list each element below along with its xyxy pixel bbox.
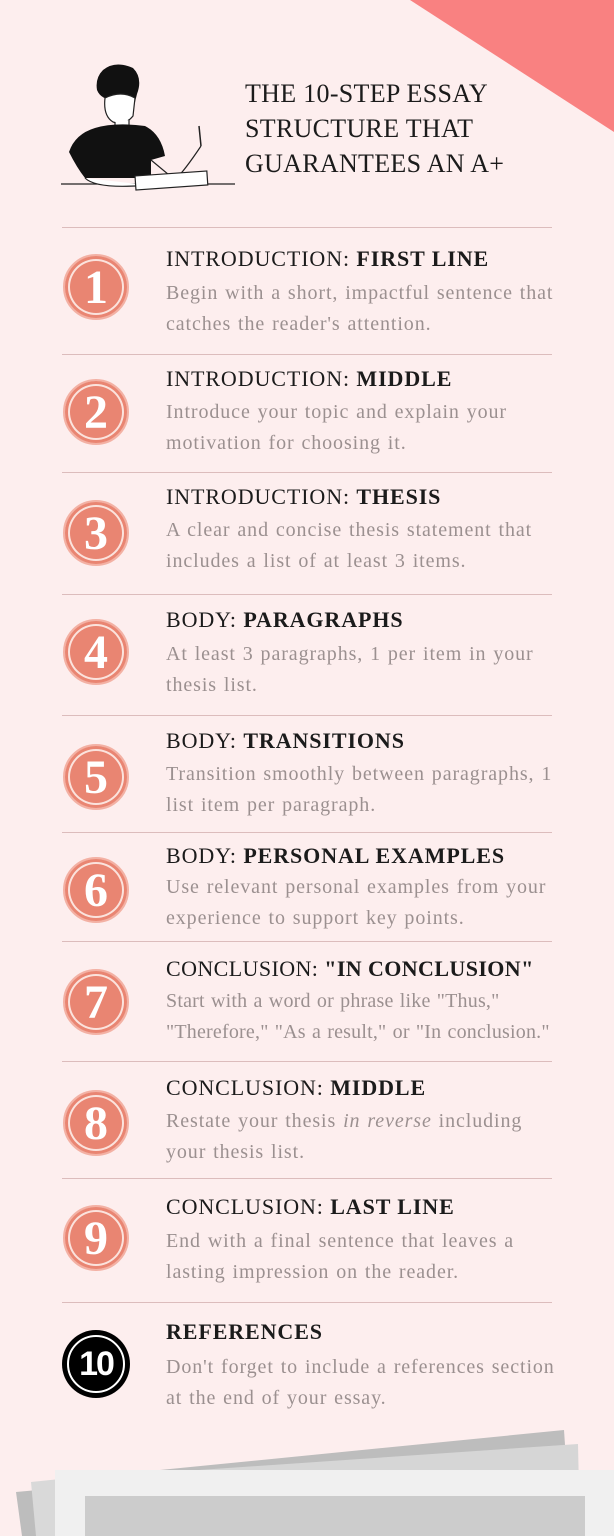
- text: [166, 643, 534, 696]
- text: lasting impression on the reader.: [166, 1261, 459, 1283]
- text: [166, 763, 552, 816]
- icon: number 5: 5: [84, 751, 108, 804]
- text: motivation for choosing it.: [166, 432, 407, 454]
- heading: INTRODUCTION: FIRST LINE: [166, 246, 489, 271]
- step 5: [63, 728, 552, 816]
- step 8: [63, 1075, 522, 1163]
- title: STRUCTURE THAT: [245, 114, 473, 143]
- heading: REFERENCES: [166, 1319, 323, 1344]
- icon: number 10: [62, 1330, 130, 1398]
- text: "Therefore," "As a result," or "In conclusion.": [166, 1021, 550, 1043]
- text: includes a list of at least 3 items.: [166, 550, 466, 572]
- icon: number 3: [63, 500, 129, 566]
- text: [166, 990, 550, 1043]
- icon: number 9: 9: [84, 1212, 108, 1265]
- heading: BODY: PARAGRAPHS: [166, 607, 404, 632]
- icon: number 6: 6: [84, 864, 108, 917]
- icon: number 7: 7: [84, 976, 108, 1029]
- text: Don't forget to include a references section: [166, 1356, 555, 1378]
- icon: number 6: [63, 857, 129, 923]
- text: catches the reader's attention.: [166, 313, 432, 335]
- text: thesis list.: [166, 674, 258, 696]
- text: Start with a word or phrase like "Thus,": [166, 990, 500, 1012]
- step 4: [63, 607, 534, 696]
- icon: number 2: [63, 379, 129, 445]
- step 6: [63, 843, 546, 929]
- text: [166, 1230, 514, 1283]
- text: [166, 1356, 555, 1409]
- heading: BODY: TRANSITIONS: [166, 728, 405, 753]
- text: A clear and concise thesis statement that: [166, 519, 532, 541]
- text: Use relevant personal examples from your: [166, 876, 546, 898]
- icon: number 5: [63, 744, 129, 810]
- heading: CONCLUSION: MIDDLE: [166, 1075, 426, 1100]
- title: [245, 79, 504, 178]
- icon: number 10: 10: [79, 1345, 113, 1383]
- step 9: [63, 1194, 514, 1283]
- text: At least 3 paragraphs, 1 per item in your: [166, 643, 534, 665]
- heading: CONCLUSION: "IN CONCLUSION": [166, 956, 534, 981]
- icon: number 2: 2: [84, 386, 108, 439]
- step 2: [63, 366, 507, 454]
- step 3: [63, 484, 532, 572]
- heading: BODY: PERSONAL EXAMPLES: [166, 843, 505, 868]
- text: [166, 1110, 522, 1163]
- icon: number 8: 8: [84, 1097, 108, 1150]
- text: Begin with a short, impactful sentence that: [166, 282, 553, 304]
- heading: CONCLUSION: LAST LINE: [166, 1194, 455, 1219]
- text: [166, 282, 553, 335]
- icon: number 4: 4: [84, 626, 108, 679]
- step 10: [62, 1319, 555, 1409]
- icon: number 3: 3: [84, 507, 108, 560]
- heading: INTRODUCTION: MIDDLE: [166, 366, 452, 391]
- text: your thesis list.: [166, 1141, 305, 1163]
- decorative corner triangle: [410, 0, 614, 132]
- text: Restate your thesis in reverse including: [166, 1110, 522, 1132]
- icon: number 7: [63, 969, 129, 1035]
- icon: number 1: [63, 254, 129, 320]
- text: experience to support key points.: [166, 907, 465, 929]
- text: Transition smoothly between paragraphs, 1: [166, 763, 552, 785]
- text: [166, 401, 507, 454]
- icon: number 8: [63, 1090, 129, 1156]
- text: [166, 876, 546, 929]
- paper stack: [16, 1430, 614, 1536]
- step 1: [63, 246, 553, 335]
- text: Introduce your topic and explain your: [166, 401, 507, 423]
- text: End with a final sentence that leaves a: [166, 1230, 514, 1252]
- step 7: [63, 956, 550, 1043]
- text: [166, 519, 532, 572]
- illustration: person at desk: [61, 64, 235, 191]
- icon: number 9: [63, 1205, 129, 1271]
- title: GUARANTEES AN A+: [245, 149, 504, 178]
- title: THE 10-STEP ESSAY: [245, 79, 488, 108]
- icon: number 4: [63, 619, 129, 685]
- heading: INTRODUCTION: THESIS: [166, 484, 441, 509]
- text: at the end of your essay.: [166, 1387, 387, 1409]
- icon: number 1: 1: [84, 261, 108, 314]
- text: list item per paragraph.: [166, 794, 376, 816]
